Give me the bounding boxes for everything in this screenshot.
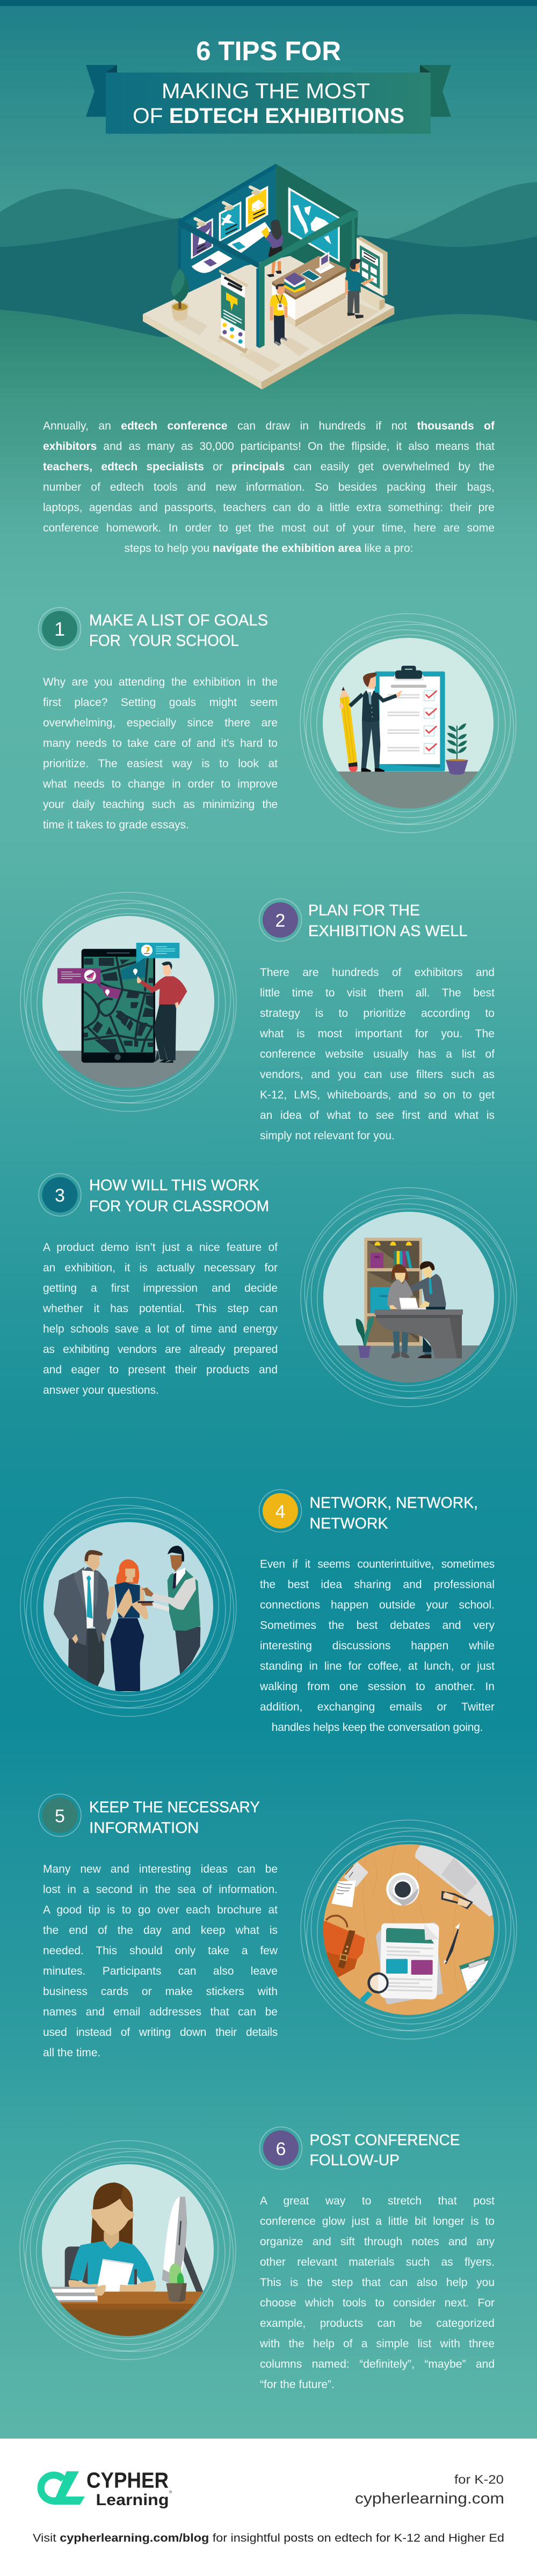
- poster: purple: [191, 218, 213, 259]
- tip 6 text: A great way to stretch that post: [260, 2195, 495, 2207]
- logo: CYPHER Learning: Learning: [96, 2491, 169, 2509]
- tip 5 text: all the time.: [43, 2047, 100, 2059]
- title ribbon: [86, 65, 451, 134]
- illustration: exhibition booth: [143, 164, 394, 389]
- tip 3 text: answer your questions.: [43, 1384, 159, 1396]
- background hills: [0, 182, 537, 389]
- tip 3 text: an exhibition, it is actually necessary for: [43, 1262, 278, 1274]
- tip 2 heading: PLAN FOR THE: [308, 902, 420, 919]
- illustration: colleagues at desk: [300, 1187, 517, 1407]
- tip 6 text: choose which tools to consider next. For: [260, 2297, 495, 2309]
- tip 3 text: A product demo isn’t just a nice feature of: [43, 1241, 278, 1254]
- footer: website: [355, 2472, 504, 2507]
- poster: truck: [246, 186, 268, 228]
- tip 2 text: what is most important for you. The: [260, 1028, 495, 1040]
- tip 3 text: as exhibiting vendors are already prepared: [43, 1343, 278, 1356]
- tip 6 text: other relevant materials such as flyers.: [260, 2256, 495, 2268]
- intro paragraph: exhibitors and as many as 30,000 participants! On the flipside, it also means that: [43, 440, 495, 453]
- tip 2 text: an idea of what to see first and what is: [260, 1109, 495, 1122]
- tip 5 text: business cards or make stickers with: [43, 1985, 278, 1998]
- illustration: phone map: [20, 892, 237, 1112]
- person: man in yellow shirt: [270, 284, 288, 346]
- tip 3 text: [43, 1241, 278, 1396]
- wall map: [288, 187, 340, 262]
- tip 4 text: standing in line for coffee, at lunch, or just: [260, 1660, 495, 1672]
- tip 2 text: [260, 966, 495, 1142]
- tip 1 heading: FOR YOUR SCHOOL: [89, 632, 239, 650]
- tip 5 text: lost in a second in the sea of information.: [43, 1883, 278, 1896]
- kiosk: [357, 237, 388, 310]
- tip 4 heading: [309, 1495, 478, 1532]
- tip 1 text: first place? Setting goals might seem: [43, 696, 278, 709]
- tip 6 text: with the help of a simple list with three: [260, 2338, 495, 2350]
- tip 6 text: [260, 2195, 495, 2391]
- tip 4 heading: NETWORK, NETWORK,: [309, 1495, 478, 1512]
- tip 1 number badge: 1: [54, 618, 65, 640]
- tip 2 number badge: [259, 899, 302, 941]
- tip 1 text: prioritize. The easiest way is to look at: [43, 758, 278, 770]
- tip 5 text: A good tip is to go over each brochure at: [43, 1904, 278, 1916]
- tip 2 text: little time to visit them all. The best: [260, 987, 495, 999]
- tip 2 text: conference website usually has a list of: [260, 1048, 495, 1060]
- tip 6 text: “for the future”.: [260, 2378, 335, 2391]
- title: 6 tips for: 6 TIPS FOR: [196, 36, 341, 66]
- tip 1 heading: [89, 612, 268, 650]
- footer: website: cypherlearning.com: [355, 2490, 504, 2507]
- tip 5 heading: KEEP THE NECESSARY: [89, 1799, 260, 1816]
- tip 1 text: what needs to change in order to improve: [43, 778, 278, 790]
- tip 5 heading: [89, 1799, 260, 1837]
- roll-up banner: [216, 270, 253, 357]
- tip 4 text: Even if it seems counterintuitive, sometimes: [260, 1558, 495, 1570]
- tip 4 text: walking from one session to another. In: [260, 1680, 495, 1693]
- footer: blog note: Visit cypherlearning.com/blog for insightful posts on edtech for K-12 and Higher Ed: [33, 2532, 504, 2544]
- tip 3 text: and eager to present their products and: [43, 1364, 278, 1376]
- tip 3 text: whether it has potential. This step can: [43, 1302, 278, 1315]
- tip 4 text: [260, 1558, 495, 1734]
- tip 4 text: the best idea sharing and professional: [260, 1578, 495, 1591]
- tip 4 text: interesting discussions happen while: [260, 1640, 495, 1652]
- tip 6 text: This is the step that can also help you: [260, 2276, 495, 2289]
- tip 2 text: K-12, LMS, whiteboards, and so on to get: [260, 1089, 495, 1101]
- tip 2 text: simply not relevant for you.: [260, 1130, 395, 1142]
- tip 6 text: example, products can be categorized: [260, 2317, 495, 2330]
- poster: airplane: [219, 201, 241, 242]
- tip 4 heading: NETWORK: [309, 1515, 388, 1532]
- roof frame: [178, 164, 358, 268]
- tip 4 number badge: [259, 1489, 302, 1532]
- tip 5 text: minutes. Participants can also leave: [43, 1965, 278, 1977]
- tip 2 heading: EXHIBITION AS WELL: [308, 922, 467, 940]
- tip 2 heading: [308, 902, 467, 940]
- tip 5 text: Many new and interesting ideas can be: [43, 1863, 278, 1875]
- tip 3 heading: FOR YOUR CLASSROOM: [89, 1198, 269, 1215]
- intro paragraph: number of edtech tools and new information. So besides packing their bags,: [43, 481, 495, 493]
- footer band line: [0, 2438, 537, 2439]
- tip 6 heading: FOLLOW-UP: [309, 2152, 400, 2169]
- tip 3 heading: HOW WILL THIS WORK: [89, 1177, 260, 1194]
- footer: website: for K-20: [454, 2472, 504, 2486]
- tip 1 text: Why are you attending the exhibition in the: [43, 676, 278, 688]
- tip 3 heading: [89, 1177, 269, 1215]
- tip 1 number badge: [39, 608, 81, 650]
- tip 2 text: vendors, and you can use filters such as: [260, 1068, 495, 1081]
- tip 5 text: the end of the day and keep what is: [43, 1924, 278, 1937]
- tip 4 text: handles helps keep the conversation going.: [272, 1721, 483, 1734]
- tip 6 number badge: 6: [276, 2139, 286, 2159]
- tip 3 text: help schools save a lot of time and energy: [43, 1323, 278, 1335]
- tip 1 text: your daily teaching such as minimizing the: [43, 798, 278, 811]
- tip 1 text: many needs to take care of and it’s hard to: [43, 737, 278, 749]
- logo: CYPHER Learning: [41, 2468, 172, 2509]
- intro paragraph: conference homework. In order to get the most out of your time, here are some: [43, 522, 495, 534]
- tip 6 number badge: [260, 2127, 302, 2169]
- desk: [272, 251, 346, 327]
- person: woman in purple: [262, 220, 283, 277]
- tip 6 heading: POST CONFERENCE: [309, 2131, 460, 2149]
- illustration: goals checklist: [300, 613, 517, 833]
- tip 6 text: conference glow just a little bit longer is to: [260, 2215, 495, 2228]
- tip 4 text: connections happen outside your school.: [260, 1599, 495, 1611]
- illustration: three people networking: [20, 1497, 237, 1717]
- tip 5 heading: INFORMATION: [89, 1820, 199, 1837]
- tip 1 heading: MAKE A LIST OF GOALS: [89, 612, 268, 629]
- front pillar: [256, 266, 265, 348]
- tip 1 text: overwhelming, especially since there are: [43, 717, 278, 729]
- wall shelves: [192, 222, 271, 273]
- illustration: woman at computer: [19, 2140, 236, 2360]
- intro paragraph: steps to help you navigate the exhibition area like a pro:: [124, 542, 413, 555]
- tip 5 text: [43, 1863, 278, 2059]
- tip 4 number badge: 4: [275, 1502, 285, 1522]
- tip 3 number badge: [39, 1174, 81, 1216]
- tip 5 text: names and email addresses that can be: [43, 2006, 278, 2018]
- logo: CYPHER Learning: ®: [169, 2490, 172, 2494]
- tip 1 text: time it takes to grade essays.: [43, 819, 189, 831]
- tip 6 text: organize and sift through notes and any: [260, 2236, 495, 2248]
- intro paragraph: [43, 420, 495, 555]
- tip 5 text: needed. This should only take a few: [43, 1945, 278, 1957]
- tip 4 text: addition, exchanging emails or Twitter: [260, 1701, 495, 1713]
- tip 5 text: used instead of writing down their details: [43, 2026, 278, 2039]
- tip 3 number badge: 3: [55, 1185, 65, 1206]
- intro paragraph: Annually, an edtech conference can draw in hundreds if not thousands of: [43, 420, 495, 432]
- tip 6 text: columns named: “definitely”, “maybe” and: [260, 2358, 495, 2370]
- person: man at kiosk: [345, 259, 374, 318]
- tip 2 text: There are hundreds of exhibitors and: [260, 966, 495, 979]
- tip 6 heading: [309, 2131, 460, 2169]
- tip 2 number badge: 2: [275, 911, 285, 931]
- tip 3 text: getting a first impression and decide: [43, 1282, 278, 1294]
- potted tree: [171, 268, 189, 321]
- title ribbon: MAKING THE MOST: [162, 79, 370, 103]
- tip 5 number badge: [39, 1794, 81, 1836]
- tip 5 number badge: 5: [55, 1806, 65, 1827]
- tip 4 text: Sometimes the best debates and very: [260, 1619, 495, 1632]
- intro paragraph: laptops, agendas and passports, teachers can do a little extra something: their pre: [43, 501, 495, 514]
- title ribbon: OF EDTECH EXHIBITIONS: [133, 104, 404, 128]
- intro paragraph: teachers, edtech specialists or principals can easily get overwhelmed by the: [43, 461, 495, 473]
- tip 1 text: [43, 676, 278, 831]
- illustration: desk top view: [300, 1820, 517, 2040]
- logo: CYPHER Learning: CYPHER: [86, 2468, 169, 2492]
- tip 2 text: strategy is to prioritize according to: [260, 1007, 495, 1020]
